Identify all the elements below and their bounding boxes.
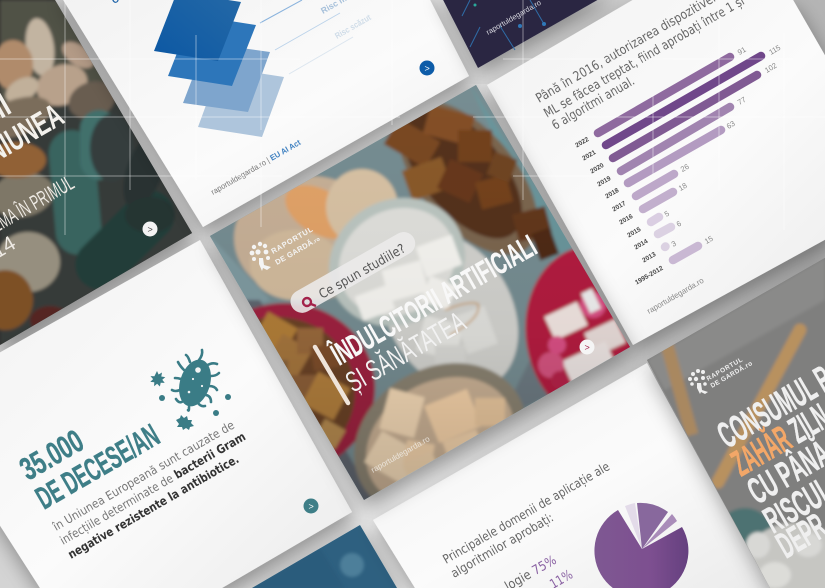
logo: RAPORTUL (270, 224, 315, 256)
year labels (574, 136, 665, 287)
value labels: 26 (679, 162, 691, 174)
logo: DE GARDĂ.ro (274, 234, 322, 267)
spoons photo (640, 250, 825, 588)
year labels: 2021 (581, 149, 598, 162)
value labels: 6 (675, 219, 683, 229)
risk leader lines (260, 0, 353, 74)
year labels: 1995-2012 (634, 265, 665, 287)
panel: pie chart card (373, 363, 770, 588)
sweeteners photo (210, 85, 630, 500)
year labels: 2015 (626, 226, 643, 239)
footer source: raportuldegarda.ro (370, 434, 432, 475)
value labels: 77 (736, 95, 748, 107)
logo: DE GARDĂ.ro (708, 358, 754, 390)
button: teal arrow: > (308, 502, 314, 512)
button: teal arrow (304, 498, 318, 514)
footer source: raportuldegarda.ro (646, 276, 706, 316)
lower jar (354, 361, 524, 496)
brown sugar jar (400, 102, 538, 256)
intro text: 6 algoritmi anual. (550, 74, 638, 133)
bar chart (598, 56, 761, 260)
value labels: 3 (670, 239, 678, 249)
central jar (387, 240, 520, 378)
button: blue arrow (420, 60, 434, 76)
paragraph: în Uniunea Europeană sunt cauzate de (50, 418, 237, 534)
logo (688, 356, 754, 394)
title line 2: ȘI SĂNĂTATEA (340, 305, 472, 399)
footer source: raportuldegarda.ro | EU AI Act (210, 138, 303, 197)
title line 1: ÎNDULCITORII ARTIFICIALI (324, 227, 542, 373)
value labels: 115 (767, 43, 782, 57)
value labels: 5 (663, 209, 671, 219)
value labels: 91 (736, 45, 748, 57)
value labels: 63 (725, 119, 737, 131)
value labels (663, 43, 782, 249)
panel: blue photo card (252, 525, 397, 588)
panel: central sweeteners card (206, 85, 638, 516)
year labels: 2014 (633, 238, 650, 251)
logo: RAPORTUL (706, 356, 744, 383)
panel: bacteria card (0, 240, 352, 588)
panel: sugar consumption photo card (640, 250, 825, 588)
icon: magnifier (303, 298, 316, 306)
year labels: 2016 (618, 213, 635, 226)
circuit dots (474, 4, 546, 28)
label: risc scazut: Risc scăzut (333, 12, 373, 41)
search pill (286, 228, 419, 317)
button: white arrow: > (584, 342, 590, 352)
sand jar (232, 174, 338, 300)
value labels: 18 (677, 181, 689, 193)
button: blue arrow: > (424, 64, 430, 74)
heading: de decese/an: DE DECESE/AN (30, 417, 165, 516)
button: capsule card arrow (142, 222, 158, 236)
panel: capsule photo card (0, 0, 200, 350)
title accent bar (315, 347, 348, 403)
capsule photo (0, 0, 200, 350)
value labels: 102 (763, 61, 778, 75)
paragraph: infecțiile determinate de bacterii Gram (58, 429, 248, 548)
left red bowl (252, 301, 376, 458)
year labels: 2022 (574, 136, 591, 149)
button: white arrow (580, 340, 594, 354)
year labels: 2018 (604, 187, 621, 200)
icon: stacked risk layers (154, 0, 284, 137)
year labels: 2017 (611, 200, 628, 213)
circuit traces (462, 0, 544, 50)
lab photo (252, 548, 364, 588)
intro text: Principalele domenii de aplicație ale (440, 458, 612, 567)
logo (250, 224, 322, 271)
panel: dark AI card (438, 0, 615, 68)
paragraph: negative rezistente la antibiotice. (66, 452, 241, 562)
icon: bacteria (150, 350, 231, 430)
right red bowl (524, 248, 630, 395)
intro text (440, 458, 612, 581)
year labels: 2020 (589, 162, 606, 175)
heading: 35.000: 35.000 (14, 422, 90, 487)
guide lines (0, 0, 825, 235)
headline (718, 366, 825, 558)
pie chart (594, 503, 688, 588)
intro text: algoritmilor aprobați: (448, 510, 556, 581)
panel: EU AI Act card (57, 0, 469, 227)
panel: bar chart card (487, 0, 825, 345)
search text: Ce spun studiile? (317, 242, 408, 302)
year labels: 2019 (596, 175, 613, 188)
year labels: 2013 (641, 251, 658, 264)
button: capsule card arrow: > (148, 224, 153, 234)
value labels: 15 (703, 234, 715, 246)
